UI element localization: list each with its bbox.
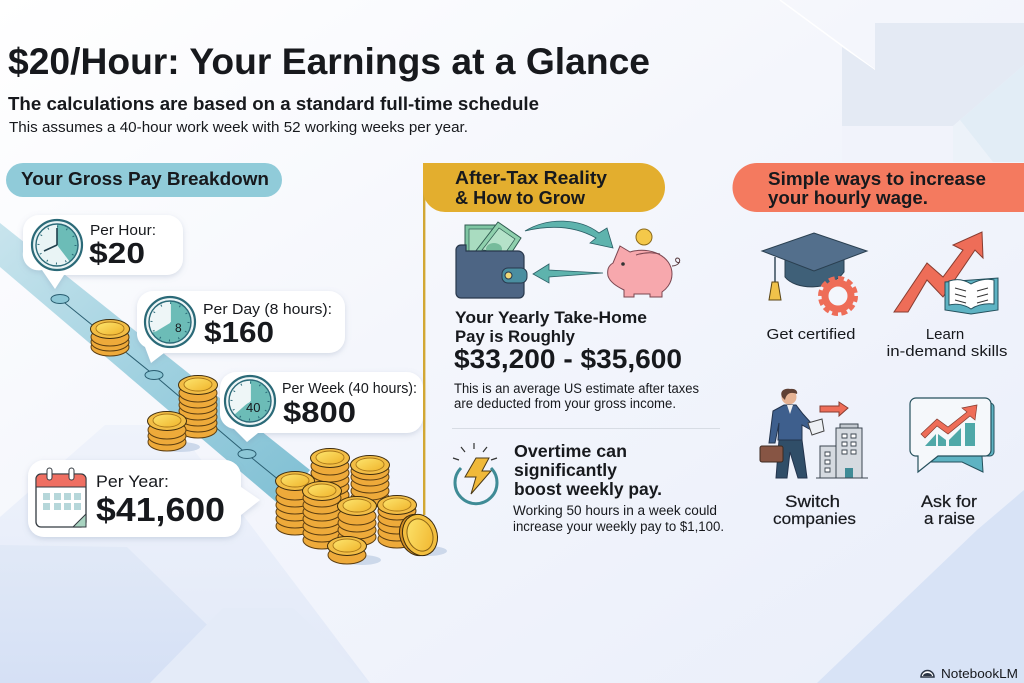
heading pill: after-tax: [423, 163, 665, 212]
callout: per year: Per Year:: [96, 472, 169, 491]
icon: rising arrow and book: [894, 232, 998, 314]
item: learn skills: in-demand skills: [886, 343, 1008, 360]
item: switch companies: companies: [773, 511, 856, 528]
take-home heading: Pay is Roughly: [455, 327, 576, 346]
coin stacks: medium: [148, 376, 218, 452]
callout: per week: Per Week (40 hours):: [282, 380, 417, 397]
icon: clock forty hours: [225, 376, 275, 426]
heading pill: after-tax: & How to Grow: [455, 187, 586, 208]
icon: clock forty hours: 40: [246, 400, 260, 415]
callout: per year: [28, 460, 260, 537]
take-home note: are deducted from your gross income.: [454, 396, 676, 411]
take-home note: This is an average US estimate after taxes: [454, 381, 699, 396]
panel: after-tax reality: [423, 163, 724, 534]
item: ask for a raise: a raise: [924, 510, 975, 528]
take-home figure: $33,200 - $35,600: [454, 344, 682, 374]
heading pill: increase wage: [732, 163, 1024, 212]
heading pill: gross pay: [6, 163, 282, 197]
coin stack: small: [90, 320, 130, 356]
heading pill: gross pay: Your Gross Pay Breakdown: [21, 168, 269, 189]
icon: clock eight hours: 8: [175, 321, 182, 335]
callout: per year: $41,600: [96, 491, 225, 528]
item: get certified: [762, 233, 867, 343]
item: learn skills: [886, 232, 1008, 360]
callout: per hour: Per Hour:: [90, 222, 156, 239]
overtime heading: Overtime can: [514, 441, 627, 461]
overtime heading: [514, 441, 662, 499]
callout: per day: [137, 291, 345, 363]
icon: overtime bolt: [453, 443, 497, 504]
heading pill: after-tax: After-Tax Reality: [455, 167, 608, 188]
heading pill: increase wage: Simple ways to increase: [768, 168, 986, 189]
panel: gross pay breakdown: [0, 163, 447, 565]
icon: person and office building: [760, 389, 868, 478]
callout: per day: Per Day (8 hours):: [203, 301, 332, 318]
icon: clock one hour: [32, 220, 82, 270]
diagonal timeline: [0, 223, 310, 507]
section rule: [423, 170, 425, 515]
icon: speech bubble chart: [910, 398, 994, 472]
callout: per hour: [23, 215, 183, 289]
callout: per week: $800: [283, 397, 356, 429]
take-home heading: Your Yearly Take-Home: [455, 308, 647, 327]
arrow: piggy bank to wallet: [533, 264, 603, 283]
coin stacks: large: [276, 448, 447, 565]
item: learn skills: Learn: [926, 326, 964, 343]
assumption note: This assumes a 40-hour work week with 52 working weeks per year.: [9, 120, 468, 136]
heading pill: increase wage: your hourly wage.: [768, 187, 928, 208]
overtime note: increase your weekly pay to $1,100.: [513, 519, 724, 534]
watermark: NotebookLM: NotebookLM: [941, 667, 1018, 681]
item: switch companies: [760, 389, 868, 528]
take-home note: [454, 381, 699, 411]
item: switch companies: Switch: [785, 493, 840, 511]
callout: per hour: $20: [89, 238, 145, 270]
subtitle: The calculations are based on a standard full-time schedule: [8, 93, 539, 114]
icon: clock eight hours: [145, 297, 195, 347]
callout: per week: [220, 372, 423, 442]
overtime note: Working 50 hours in a week could: [513, 503, 717, 518]
item: ask for a raise: [910, 398, 994, 528]
item: ask for a raise: Ask for: [921, 493, 978, 511]
item: get certified: Get certified: [766, 326, 856, 343]
icon: calendar: [36, 468, 86, 527]
icon: piggy bank: [608, 229, 680, 297]
title: $20/Hour: Your Earnings at a Glance: [8, 40, 650, 82]
overtime note: [513, 503, 724, 534]
overtime heading: significantly: [514, 460, 617, 480]
panel: increase hourly wage: [732, 163, 1024, 528]
overtime heading: boost weekly pay.: [514, 479, 662, 499]
take-home heading: [455, 308, 647, 346]
arrow: wallet to piggy bank: [525, 221, 613, 248]
callout: per day: $160: [204, 317, 274, 349]
icon: wallet: [456, 222, 527, 298]
icon: graduation cap and gear: [762, 233, 867, 314]
